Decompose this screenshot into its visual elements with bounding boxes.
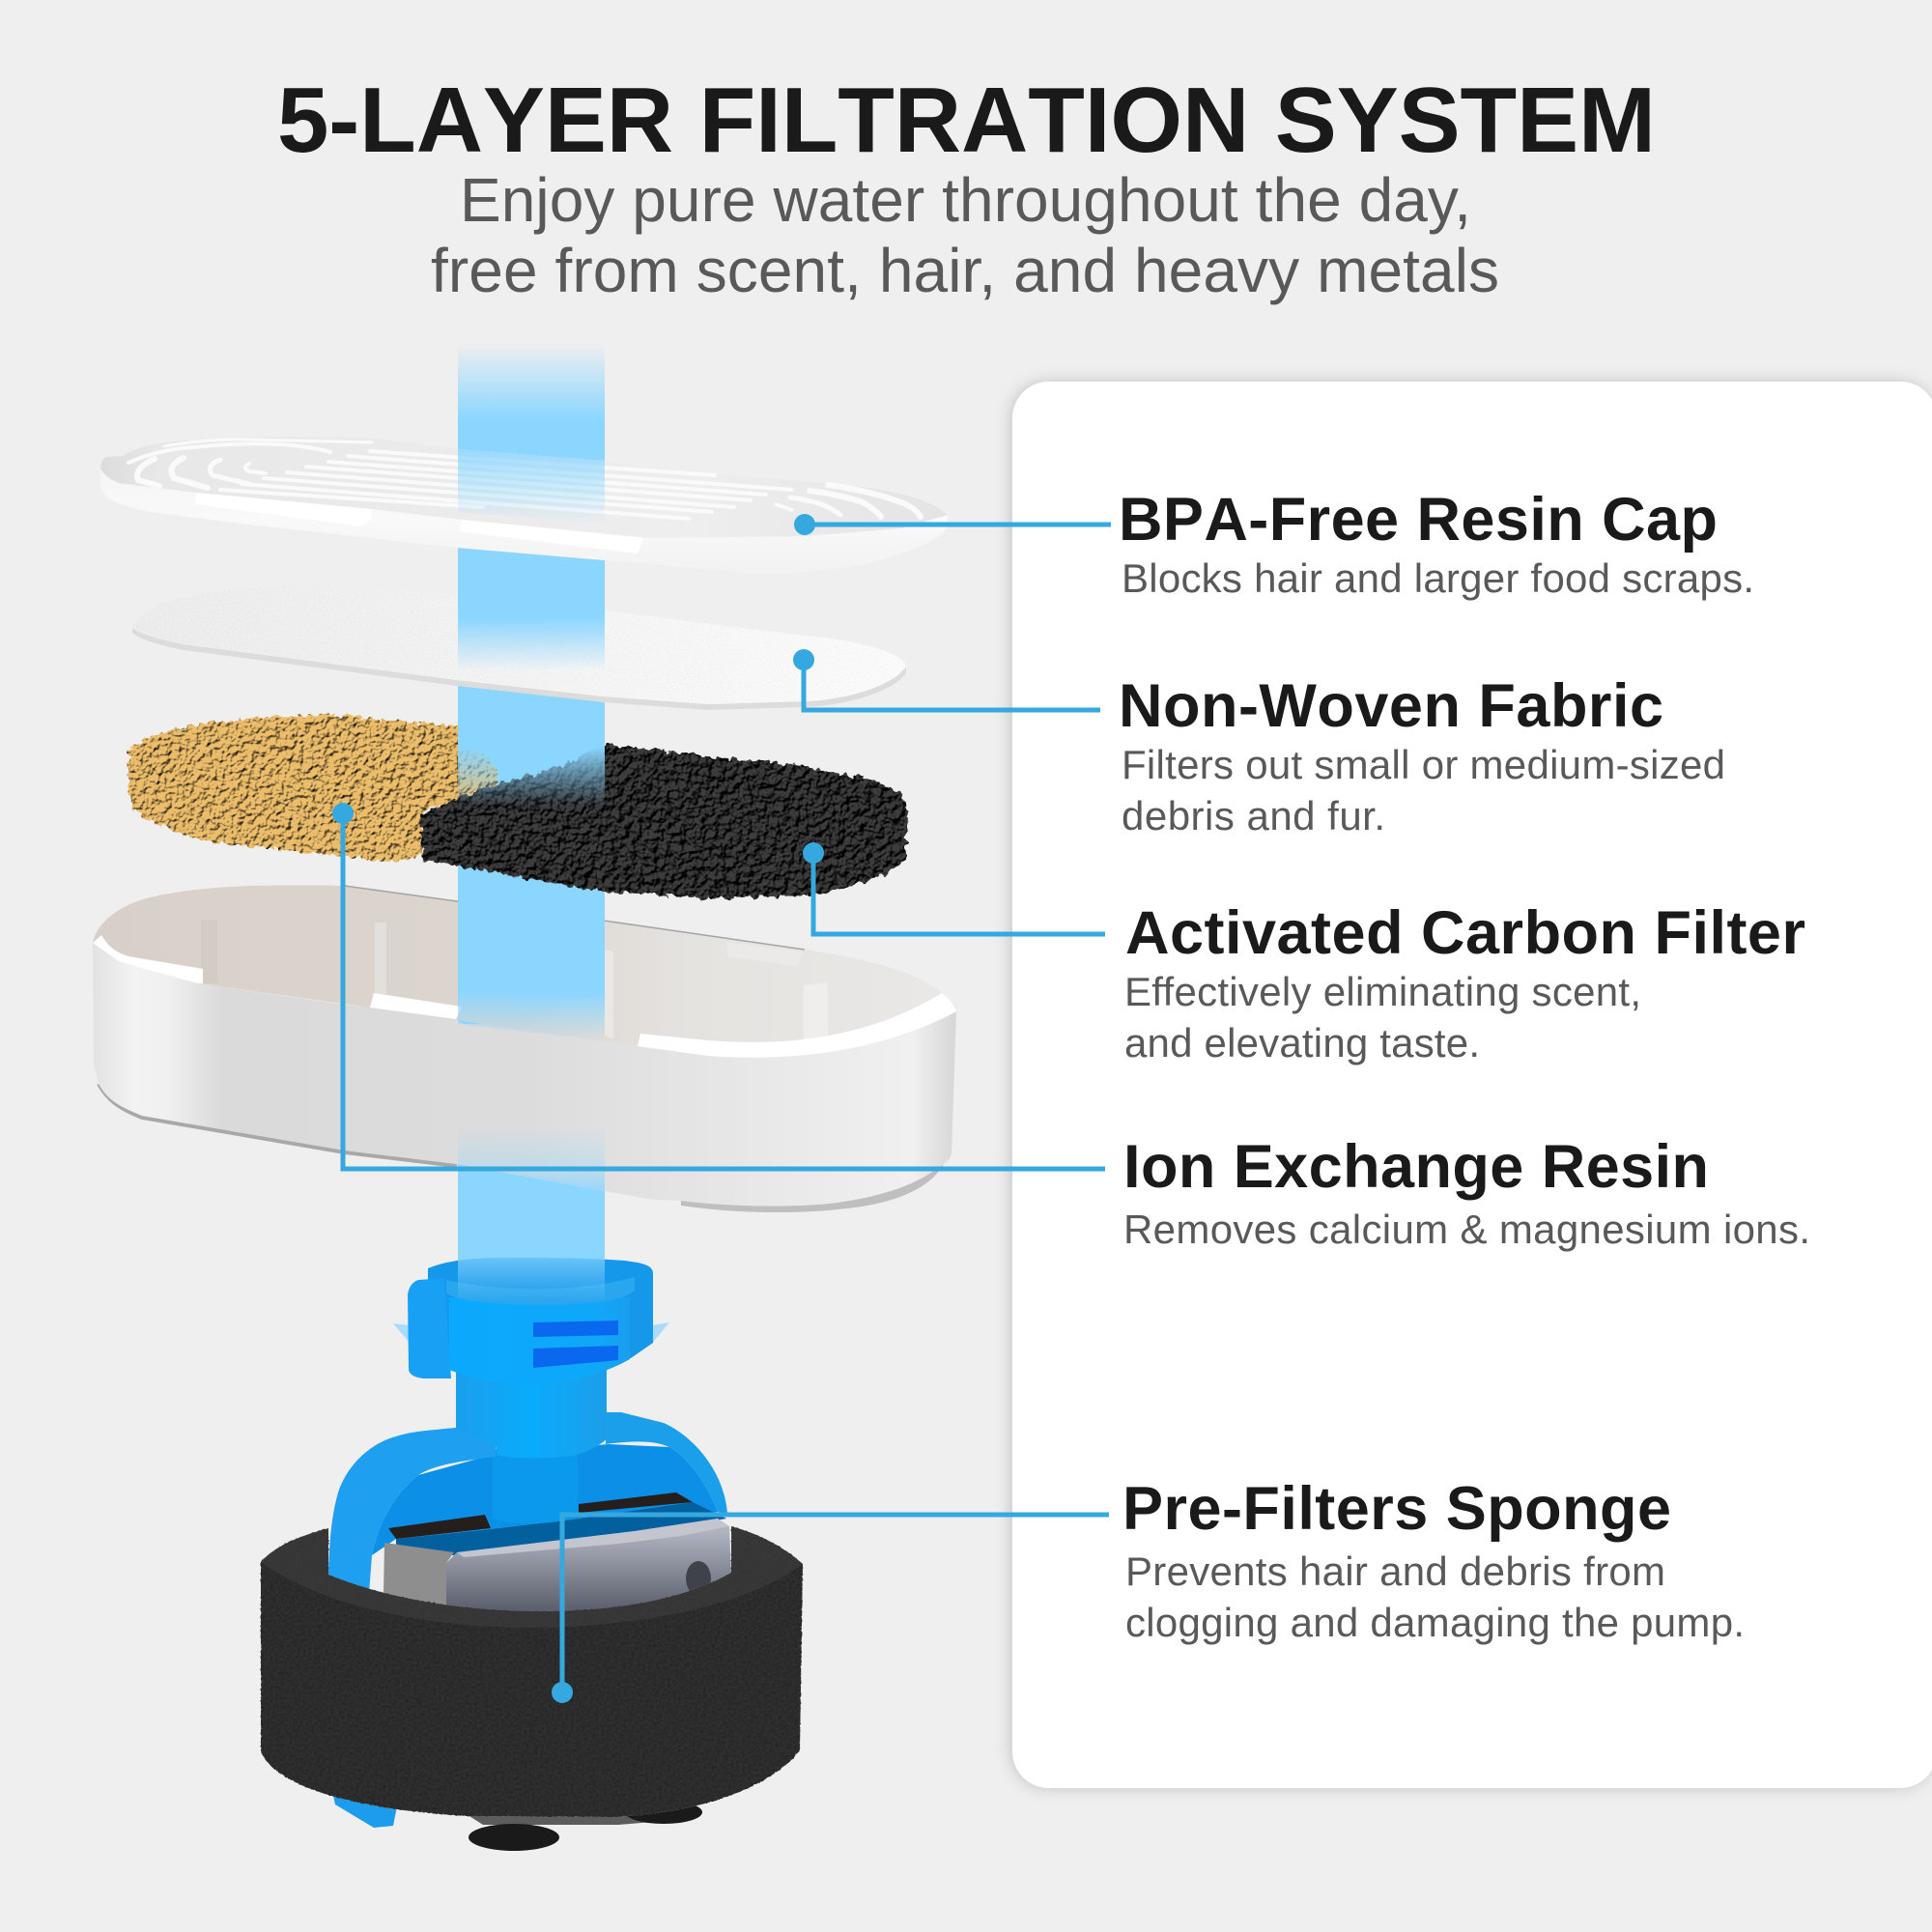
panel: white feature list [1012,382,1932,1788]
left clip [408,1278,451,1378]
feature text: Ion Exchange Resin [1123,1133,1810,1252]
part: BPA-free resin cap [100,437,948,573]
feature text: Non-Woven Fabric: Non-Woven Fabric [1119,672,1663,740]
tray white rim [93,935,956,1058]
feature text: Pre-Filters Sponge: Prevents hair and debris from [1125,1548,1665,1594]
blue arm interior [372,1444,718,1555]
tray bottom right band [681,1164,944,1212]
feature text: Activated Carbon Filter: and elevating taste. [1124,1020,1480,1065]
part: filter tray [93,885,956,1212]
feature text: Activated Carbon Filter: Effectively eliminating scent, [1124,969,1641,1014]
feature text: BPA-Free Resin Cap: BPA-Free Resin Cap [1119,486,1718,554]
tray front wall [93,943,956,1207]
pump underside [454,1806,696,1825]
part: ion exchange resin sponge [128,715,502,862]
pump feet [469,1801,702,1851]
cap slots [128,440,921,519]
pump black plates [388,1492,693,1539]
left arm [328,1428,496,1594]
right arm [606,1412,727,1514]
feature text: Activated Carbon Filter: Activated Carbon Filter [1125,899,1805,967]
beam over pump top [458,1252,605,1302]
part: pre-filter sponge and pump [261,1258,803,1851]
feature text: BPA-Free Resin Cap: Blocks hair and larger food scraps. [1122,555,1754,601]
feature text: Non-Woven Fabric: debris and fur. [1122,793,1385,838]
grey pump box [384,1543,454,1608]
water flow beam [458,343,605,1290]
tray inner ribs [201,920,828,1040]
beam over tray interior [458,898,605,1041]
tray interior [93,885,956,1058]
collar body [449,1297,630,1383]
dark blue pump deck [396,1502,726,1555]
pump cover highlight [457,1519,729,1557]
pump bottom blue tab [331,1787,397,1828]
feature text: Ion Exchange Resin: Removes calcium & magnesium ions. [1123,1207,1810,1252]
cap white tabs [195,493,643,554]
subtitle [431,165,1499,305]
sponge top rim [261,1526,803,1628]
sponge front [261,1526,803,1817]
collar slits [533,1321,618,1368]
feature text: Activated Carbon Filter [1124,899,1805,1065]
tray top edge line [345,886,805,950]
small side arrows [393,1322,669,1345]
feature text: Ion Exchange Resin: Ion Exchange Resin [1123,1133,1709,1201]
fabric top surface [132,586,906,704]
part: non-woven fabric [132,586,906,710]
part: activated carbon filter [420,744,908,898]
feature text: Pre-Filters Sponge: Pre-Filters Sponge [1122,1475,1671,1543]
callout: carbon line [803,842,1105,934]
subtitle: Enjoy pure water throughout the day, [460,165,1471,235]
subtitle: free from scent, hair, and heavy metals [431,236,1499,305]
lower stem [493,1449,578,1523]
collar lip [446,1277,635,1305]
beam tint on cap [458,449,605,524]
cap top surface [100,437,948,538]
pump cover hole [686,1561,711,1596]
callout: ion resin line [332,803,1105,1169]
callout: resin cap line [794,514,1111,535]
right clip [428,1258,653,1358]
feature text: Pre-Filters Sponge: clogging and damaging the pump. [1125,1600,1745,1645]
beam over fabric [458,589,605,670]
pump neck [456,1367,607,1458]
feature text: Non-Woven Fabric: Filters out small or medium-sized [1122,742,1725,787]
title: 5-LAYER FILTRATION SYSTEM [277,69,1656,172]
tray underside band [99,1084,457,1166]
beam over tray lower wall [458,1125,605,1191]
translucent pump cover [446,1519,731,1613]
feature text: BPA-Free Resin Cap [1119,486,1754,601]
beam over sponges [458,715,605,807]
callout: fabric line [793,649,1100,710]
callout: pre-filter sponge line [552,1515,1109,1703]
feature text: Pre-Filters Sponge [1122,1475,1745,1645]
feature text: Non-Woven Fabric [1119,672,1725,838]
